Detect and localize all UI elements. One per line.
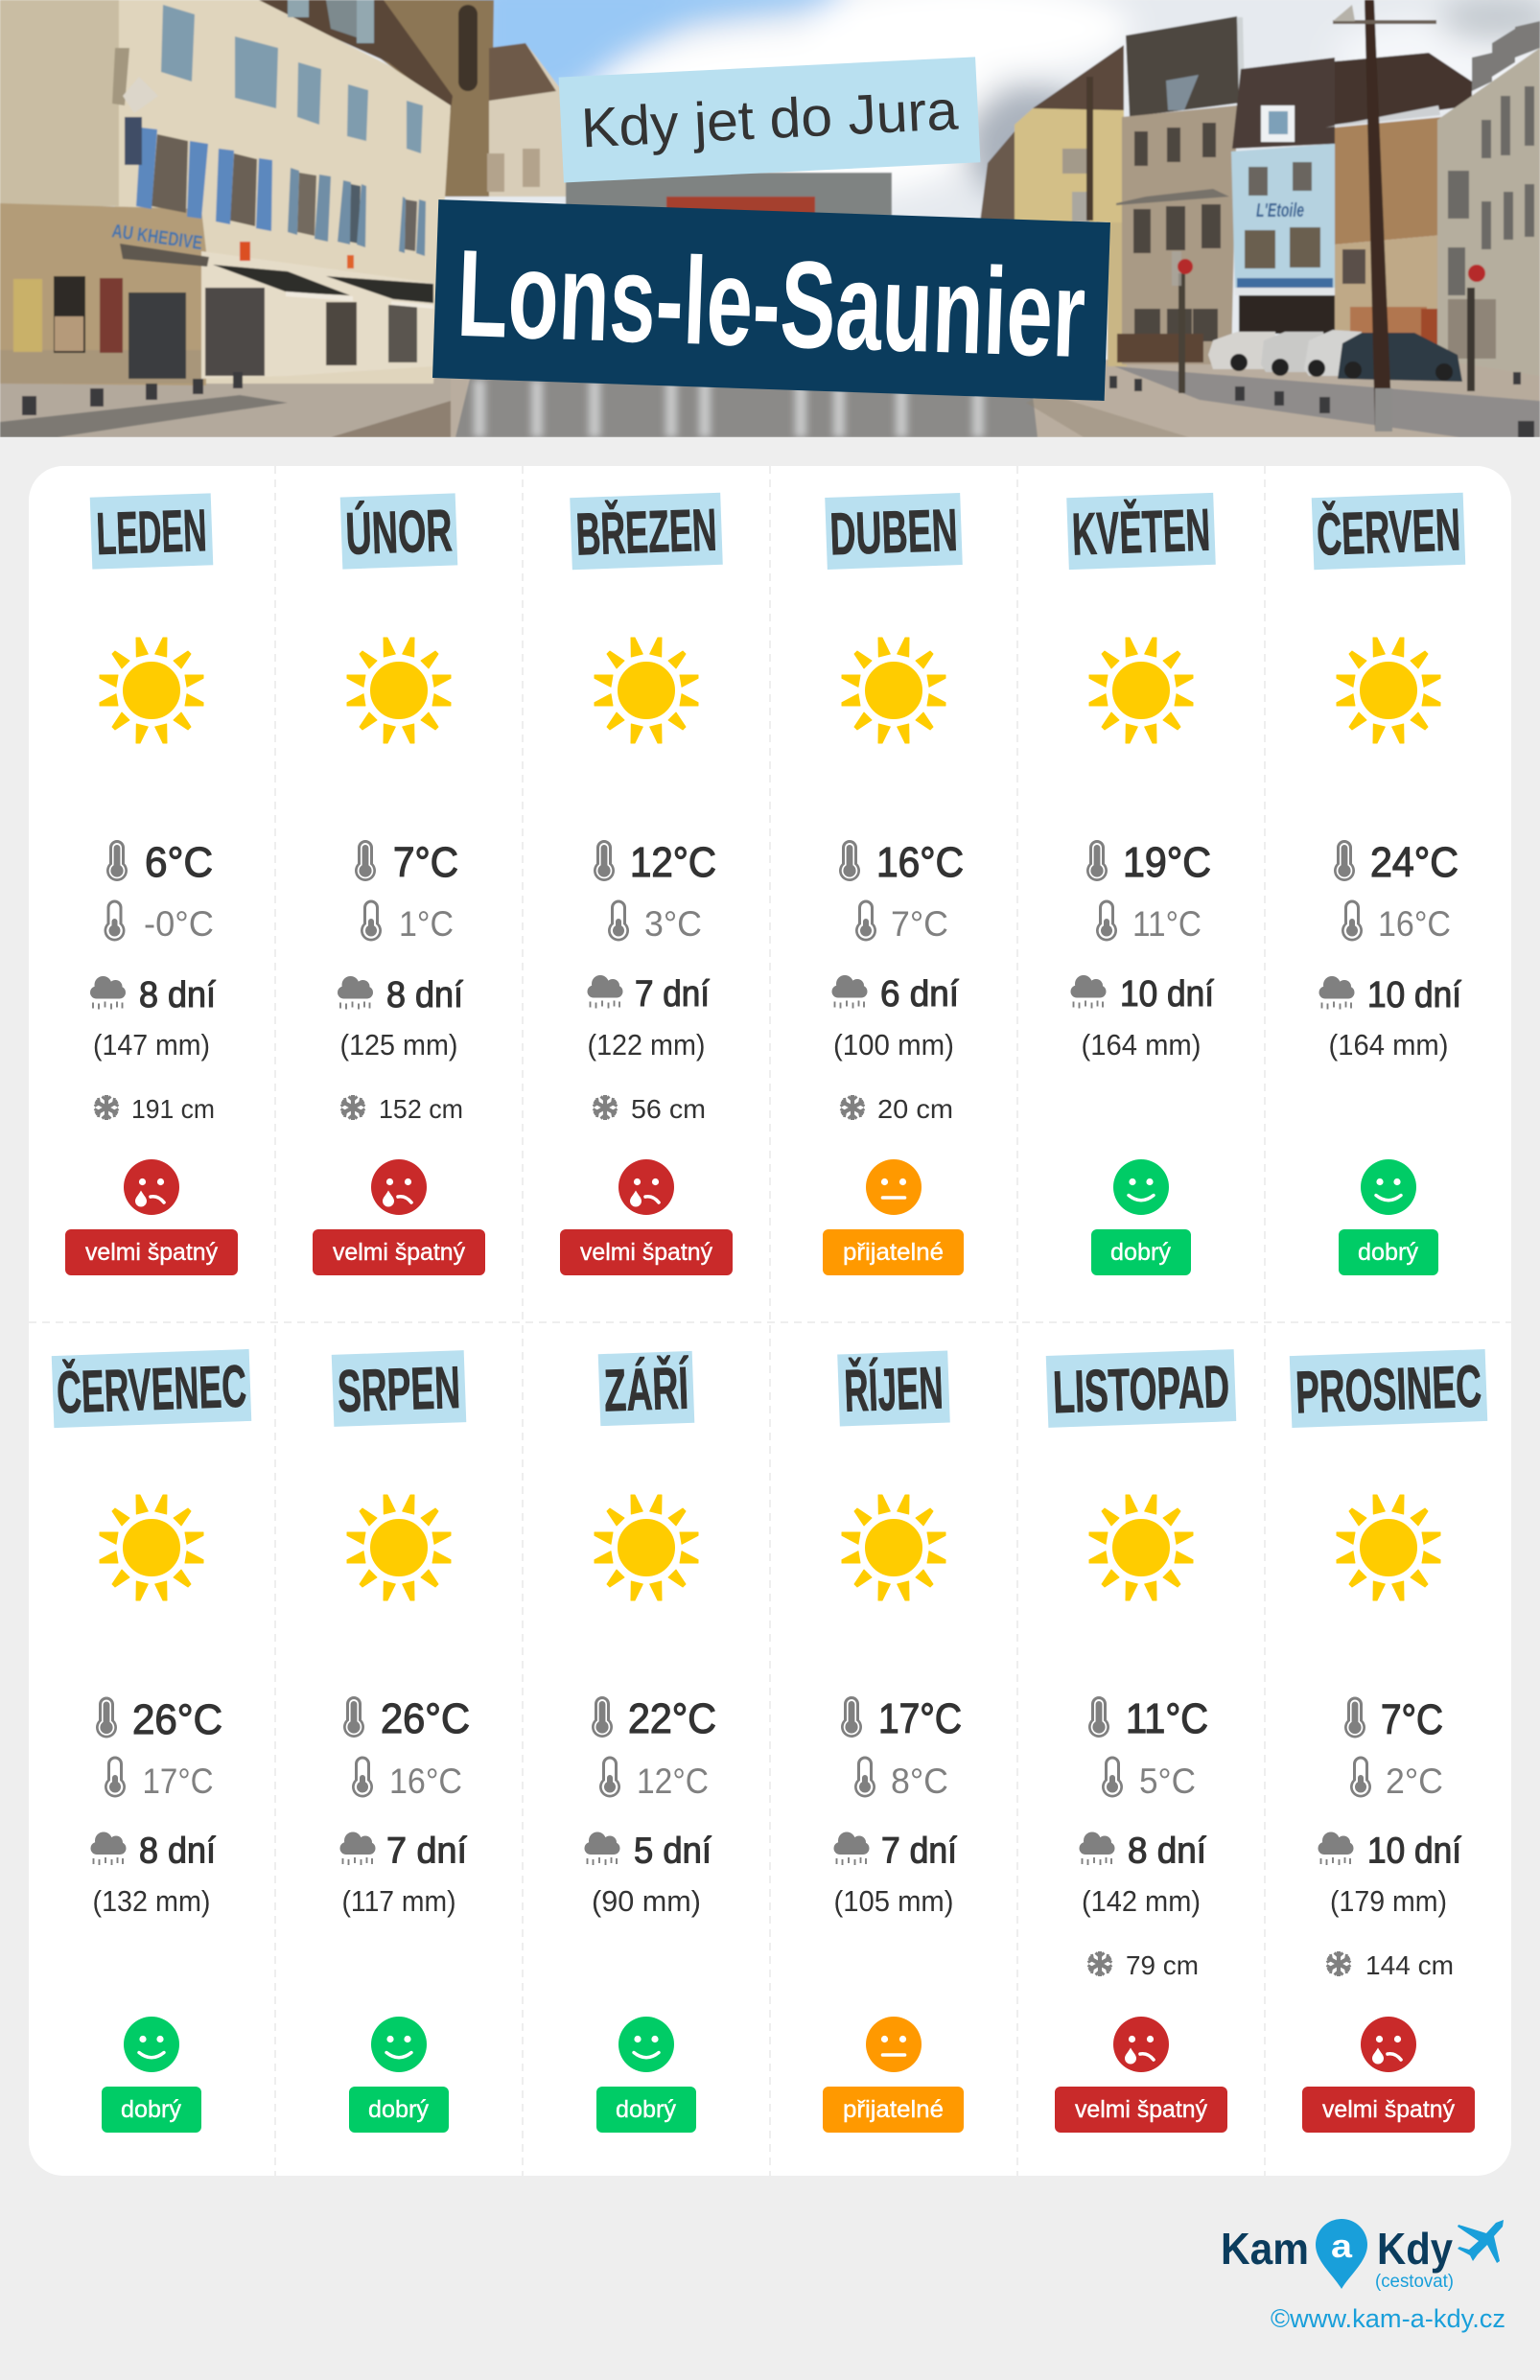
max temperature: 19°C — [1123, 839, 1211, 886]
max temperature — [343, 1695, 470, 1742]
precipitation: (100 mm) — [833, 1028, 954, 1062]
snow depth — [593, 1094, 706, 1124]
rain days: 10 dní — [1367, 975, 1461, 1015]
cell: ČERVEN — [1312, 493, 1465, 1275]
cell: DUBEN — [823, 493, 964, 1275]
badge: velmi špatný — [1302, 2087, 1475, 2133]
precipitation: (142 mm) — [1082, 1884, 1201, 1918]
badge: velmi špatný: velmi špatný — [333, 1239, 465, 1266]
icon: sad face — [1361, 2017, 1416, 2072]
min temperature — [854, 1757, 948, 1801]
snow depth — [94, 1094, 215, 1124]
cell: KVĚTEN — [1066, 493, 1216, 1275]
rain days: 8 dní — [386, 975, 463, 1015]
icon: map pin — [1316, 2219, 1367, 2289]
icon: sun — [595, 638, 698, 743]
icon: sun — [1089, 1495, 1193, 1600]
snow depth: 20 cm — [877, 1094, 953, 1124]
icon: happy face — [1113, 1159, 1169, 1215]
rain days: 6 dní — [880, 974, 959, 1015]
max temperature — [1334, 839, 1458, 886]
badge: dobrý — [1091, 1229, 1191, 1275]
header photo: town square: L'Etoile — [1256, 200, 1304, 222]
heading: KVĚTEN: KVĚTEN — [1071, 498, 1211, 568]
logo: Kam a Kdy — [1221, 2219, 1504, 2292]
badge: velmi špatný: velmi špatný — [580, 1239, 712, 1266]
shop fronts — [120, 244, 209, 267]
badge: velmi špatný — [1055, 2087, 1227, 2133]
heading: ŘÍJEN: ŘÍJEN — [843, 1355, 945, 1425]
heading: KVĚTEN — [1066, 493, 1216, 570]
heading: LISTOPAD: LISTOPAD — [1052, 1354, 1230, 1426]
precipitation: (90 mm) — [592, 1884, 701, 1918]
max temperature — [106, 839, 213, 886]
min temperature: 11°C — [1132, 904, 1202, 944]
min temperature — [599, 1757, 709, 1801]
icon: happy face — [618, 2017, 674, 2072]
subtitle banner: Kdy jet do Jura — [559, 57, 980, 183]
max temperature: 11°C — [1126, 1695, 1208, 1742]
max temperature: 16°C — [876, 839, 964, 886]
rain days: 8 dní — [139, 975, 216, 1015]
min temperature — [1096, 899, 1202, 944]
title banner: Lons-le-Saunier: Lons-le-Saunier — [455, 224, 1087, 384]
badge: velmi špatný — [560, 1229, 733, 1275]
min temperature: 1°C — [399, 904, 454, 944]
ground — [450, 359, 1521, 437]
max temperature — [592, 1695, 716, 1742]
max temperature — [1344, 1696, 1443, 1743]
cell: ZÁŘÍ — [585, 1351, 716, 2133]
badge: přijatelné — [823, 1229, 964, 1275]
min temperature: 16°C — [1378, 904, 1451, 944]
min temperature — [352, 1757, 462, 1801]
rain days: 5 dní — [634, 1832, 712, 1872]
heading: LEDEN — [90, 493, 213, 570]
icon: sun — [347, 638, 451, 743]
cell: ČERVENEC — [52, 1349, 251, 2133]
icon: sun — [1337, 638, 1440, 743]
icon: sun — [100, 638, 203, 743]
max temperature: 17°C — [878, 1695, 962, 1742]
heading: ÚNOR — [340, 493, 457, 570]
badge: přijatelné: přijatelné — [843, 1239, 944, 1266]
heading: SRPEN — [332, 1350, 466, 1427]
snow depth: 56 cm — [631, 1094, 706, 1124]
badge: dobrý — [1339, 1229, 1438, 1275]
badge: velmi špatný: velmi špatný — [1075, 2096, 1207, 2123]
min temperature: 3°C — [644, 904, 702, 944]
title banner: Lons-le-Saunier — [432, 199, 1110, 401]
max temperature — [1086, 839, 1211, 886]
icon: sad face — [618, 1159, 674, 1215]
precipitation: (164 mm) — [1082, 1028, 1201, 1062]
badge: velmi špatný — [65, 1229, 238, 1275]
badge: dobrý — [102, 2087, 201, 2133]
badge: dobrý — [349, 2087, 449, 2133]
max temperature — [594, 839, 716, 886]
sky — [343, 0, 1471, 359]
icon: happy face — [1361, 1159, 1416, 1215]
max temperature: 7°C — [1381, 1696, 1443, 1743]
rain days — [587, 974, 710, 1015]
min temperature: 7°C — [891, 904, 948, 944]
cell: ŘÍJEN — [823, 1351, 964, 2133]
badge: přijatelné: přijatelné — [843, 2096, 944, 2123]
cell: LISTOPAD — [1046, 1349, 1236, 2133]
max temperature — [355, 839, 458, 886]
max temperature — [96, 1696, 222, 1743]
header photo: town square — [0, 0, 1540, 437]
rain days: 7 dní — [635, 974, 710, 1015]
icon: neutral face — [866, 1159, 922, 1215]
icon: sad face — [124, 1159, 179, 1215]
rain days: 7 dní — [881, 1832, 957, 1872]
horse statues and cars — [1117, 334, 1203, 362]
badge: velmi špatný: velmi špatný — [1322, 2096, 1455, 2123]
min temperature: 5°C — [1139, 1762, 1196, 1801]
min temperature: 2°C — [1386, 1762, 1443, 1801]
logo: Kam a Kdy: (cestovat) — [1375, 2272, 1454, 2292]
centre buildings — [489, 43, 566, 197]
heading: ZÁŘÍ — [598, 1351, 694, 1426]
precipitation: (125 mm) — [339, 1028, 458, 1062]
cell: ÚNOR — [313, 493, 485, 1275]
rain days: 8 dní — [139, 1832, 216, 1872]
heading: SRPEN: SRPEN — [337, 1355, 461, 1425]
max temperature: 26°C — [132, 1696, 222, 1743]
precipitation: (132 mm) — [92, 1884, 211, 1918]
rain days: 10 dní — [1367, 1832, 1461, 1872]
precipitation: (122 mm) — [587, 1028, 706, 1062]
badge: dobrý: dobrý — [121, 2096, 181, 2123]
right buildings — [980, 131, 1015, 222]
max temperature: 22°C — [628, 1695, 716, 1742]
heading: DUBEN: DUBEN — [828, 498, 959, 568]
cell: SRPEN — [332, 1350, 470, 2133]
snow depth: 191 cm — [131, 1094, 215, 1124]
icon: neutral face — [866, 2017, 922, 2072]
rain days — [832, 974, 959, 1015]
heading: BŘEZEN — [570, 493, 723, 570]
bollards — [22, 372, 243, 415]
left building — [374, 0, 494, 197]
panel: calendar card — [29, 466, 1511, 2176]
badge: velmi špatný — [313, 1229, 485, 1275]
rain days — [1080, 1832, 1206, 1872]
icon: sun — [347, 1495, 451, 1600]
heading: ÚNOR: ÚNOR — [344, 498, 454, 568]
icon: map pin: a — [1331, 2228, 1353, 2265]
heading: ŘÍJEN — [837, 1351, 950, 1426]
max temperature — [841, 1695, 962, 1742]
min temperature — [1350, 1757, 1443, 1801]
website link: ©www.kam-a-kdy.cz — [1271, 2304, 1505, 2333]
max temperature: 24°C — [1370, 839, 1458, 886]
max temperature — [1088, 1695, 1208, 1742]
heading: ZÁŘÍ: ZÁŘÍ — [603, 1355, 690, 1425]
heading: LEDEN: LEDEN — [95, 498, 208, 568]
min temperature: 12°C — [637, 1762, 709, 1801]
badge: dobrý — [596, 2087, 696, 2133]
icon: happy face — [371, 2017, 427, 2072]
subtitle banner: Kdy jet do Jura: Kdy jet do Jura — [580, 79, 960, 160]
min temperature: -0°C — [144, 904, 214, 944]
heading: ČERVENEC — [52, 1349, 251, 1428]
precipitation: (164 mm) — [1329, 1028, 1448, 1062]
min temperature — [608, 899, 702, 944]
badge: dobrý: dobrý — [1358, 1239, 1418, 1266]
icon: happy face — [124, 2017, 179, 2072]
snow depth: 144 cm — [1365, 1950, 1454, 1980]
badge: dobrý: dobrý — [1110, 1239, 1171, 1266]
min temperature — [1342, 899, 1451, 944]
rain days: 10 dní — [1120, 974, 1214, 1015]
snow depth — [1327, 1950, 1454, 1980]
precipitation: (117 mm) — [341, 1884, 456, 1918]
snow depth: 152 cm — [379, 1094, 463, 1124]
rain days — [90, 1832, 216, 1872]
heading: BŘEZEN: BŘEZEN — [574, 497, 718, 569]
rain days — [338, 975, 463, 1015]
rain days: 7 dní — [386, 1832, 467, 1872]
badge: dobrý: dobrý — [616, 2096, 676, 2123]
min temperature — [105, 1757, 213, 1801]
badge: velmi špatný: velmi špatný — [85, 1239, 218, 1266]
heading: DUBEN — [825, 493, 963, 570]
icon: sad face — [371, 1159, 427, 1215]
icon: sun — [842, 638, 945, 743]
fountain — [455, 379, 1038, 437]
logo: Kam a Kdy: Kdy — [1377, 2224, 1453, 2274]
rain days — [1070, 974, 1214, 1015]
rain days — [1318, 1832, 1461, 1872]
max temperature: 26°C — [381, 1695, 470, 1742]
cell: PROSINEC — [1290, 1349, 1487, 2133]
icon: sad face — [1113, 2017, 1169, 2072]
rain days: 8 dní — [1128, 1832, 1206, 1872]
icon: airplane — [1458, 2220, 1504, 2263]
min temperature — [1102, 1757, 1196, 1801]
min temperature — [361, 899, 454, 944]
badge: přijatelné — [823, 2087, 964, 2133]
heading: ČERVENEC: ČERVENEC — [56, 1354, 247, 1426]
icon: sun — [100, 1495, 203, 1600]
shutters and windows — [161, 5, 423, 153]
min temperature — [104, 899, 214, 944]
heading: LISTOPAD — [1046, 1349, 1236, 1428]
badge: dobrý: dobrý — [368, 2096, 429, 2123]
cell: LEDEN — [65, 493, 238, 1275]
min temperature: 16°C — [389, 1762, 462, 1801]
cell: BŘEZEN — [560, 493, 733, 1275]
min temperature: 8°C — [891, 1762, 948, 1801]
max temperature: 6°C — [145, 839, 213, 886]
rain days — [585, 1832, 712, 1872]
logo: Kam a Kdy: Kam — [1221, 2224, 1309, 2274]
min temperature: 17°C — [142, 1762, 213, 1801]
max temperature: 7°C — [393, 839, 458, 886]
min temperature — [855, 899, 948, 944]
rain days — [339, 1832, 467, 1872]
max temperature: 12°C — [630, 839, 716, 886]
icon: sun — [1337, 1495, 1440, 1600]
precipitation: (147 mm) — [93, 1028, 210, 1062]
poles and signs — [1365, 0, 1392, 432]
snow depth — [840, 1094, 953, 1124]
icon: sun — [1089, 638, 1193, 743]
header photo: town square: AU KHEDIVE — [110, 221, 203, 254]
precipitation: (179 mm) — [1330, 1884, 1447, 1918]
snow depth — [1087, 1950, 1199, 1980]
snow depth: 79 cm — [1126, 1950, 1199, 1980]
max temperature — [839, 839, 964, 886]
icon: sun — [595, 1495, 698, 1600]
rain days — [834, 1832, 957, 1872]
icon: sun — [842, 1495, 945, 1600]
precipitation: (105 mm) — [834, 1884, 953, 1918]
snow depth — [341, 1094, 463, 1124]
rain days — [90, 975, 216, 1015]
heading: ČERVEN — [1312, 493, 1465, 570]
rain days — [1319, 975, 1461, 1015]
